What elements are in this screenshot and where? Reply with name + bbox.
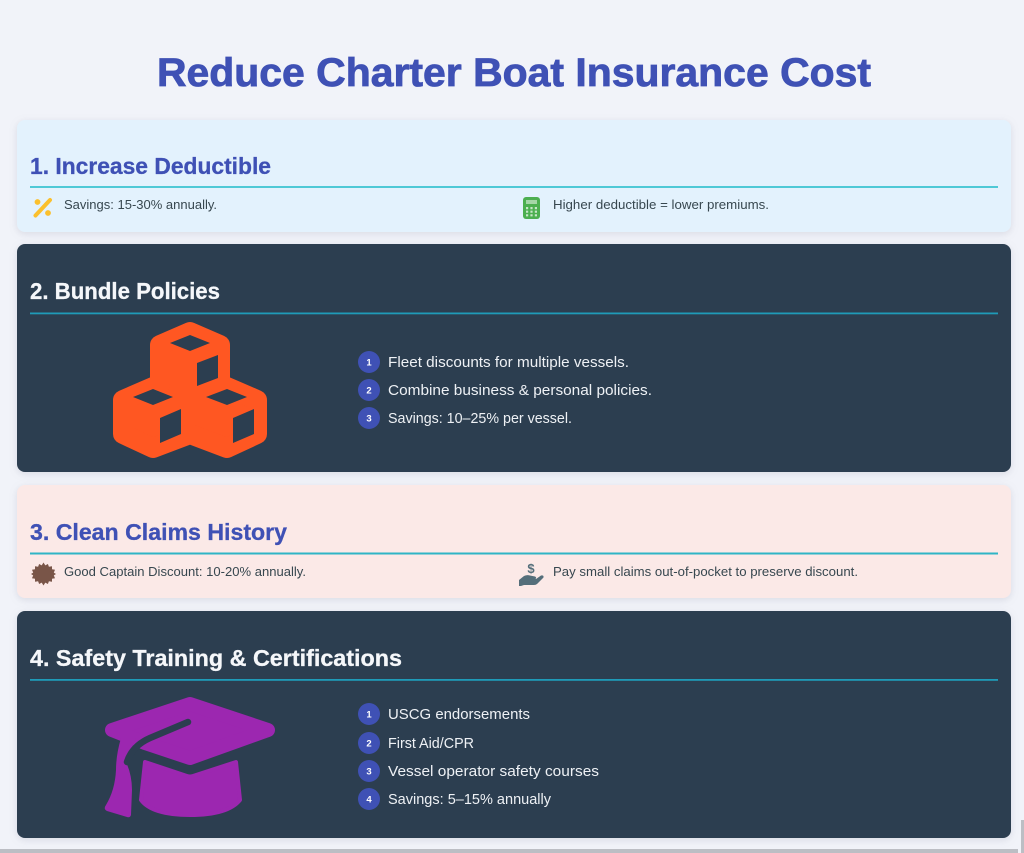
icon: hand holding dollar: $ [527,561,535,576]
heading: clean claims history: 3. Clean Claims History [30,519,287,545]
panel: 4. safety training [17,611,1011,838]
list: bundle points: 2 [366,386,372,396]
list: safety points: First Aid/CPR [388,736,474,752]
panel: 3. clean claims history [17,485,1011,598]
icon: certificate badge [31,562,56,586]
list: bundle points [358,351,652,429]
list: safety points [358,703,599,810]
title: Reduce Charter Boat Insurance Cost [157,51,871,95]
text: pay small claims: Pay small claims out-of-pocket to preserve discount. [553,564,858,579]
heading: safety training: 4. Safety Training & Certifications [30,645,402,671]
icon: cubes [123,332,257,448]
list: safety points: Vessel operator safety courses [388,764,599,780]
list: safety points: 2 [366,738,372,750]
text: higher deductible: Higher deductible = lower premiums. [553,197,769,212]
list: safety points: 4 [366,794,372,806]
heading: increase deductible: 1. Increase Deductible [30,153,271,179]
panel: 2. bundle policies [17,244,1011,472]
list: bundle points: Combine business & personal policies. [388,383,652,399]
icon: calculator [523,197,540,219]
icon: percent [35,199,51,216]
list: safety points: 3 [366,766,372,778]
list: bundle points: 3 [366,414,372,424]
icon: hand holding dollar [519,561,544,586]
list: safety points: 1 [366,710,372,720]
text: savings: Savings: 15-30% annually. [64,197,217,212]
list: safety points: Savings: 5–15% annually [388,792,552,808]
panel: 1. increase deductible [17,120,1011,232]
text: good captain discount: Good Captain Discount: 10-20% annually. [64,564,306,579]
heading: bundle policies: 2. Bundle Policies [30,278,220,304]
list: safety points: USCG endorsements [388,707,530,723]
icon: graduation cap [105,704,268,817]
list: bundle points: Fleet discounts for multiple vessels. [388,355,629,371]
list: bundle points: 1 [366,358,372,368]
list: bundle points: Savings: 10–25% per vessel. [388,411,572,427]
